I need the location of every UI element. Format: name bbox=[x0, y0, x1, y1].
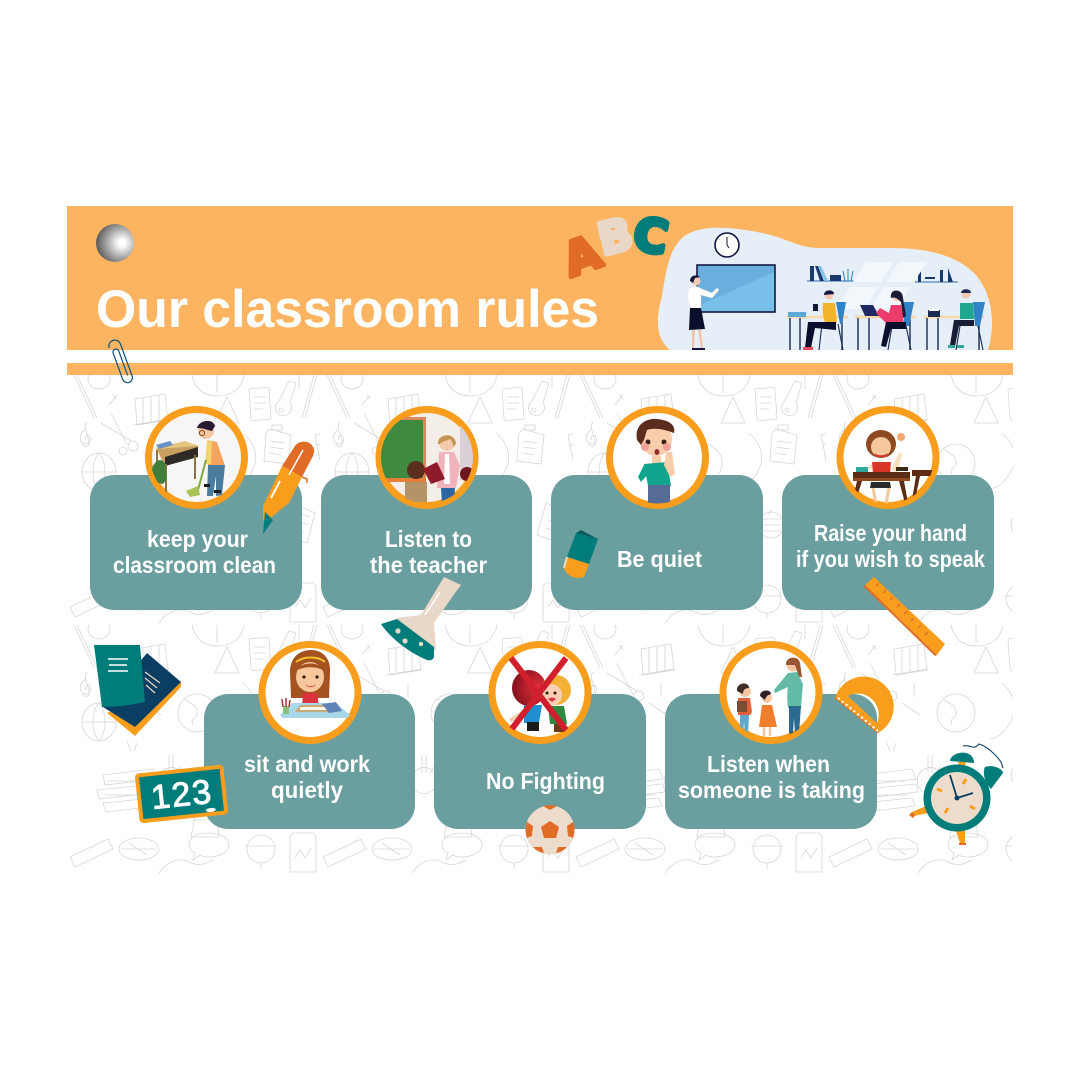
rule text: the teacher bbox=[370, 552, 487, 578]
icon: ruler bbox=[864, 577, 945, 656]
orange stripe bbox=[67, 363, 1013, 375]
rule text: Listen when bbox=[707, 751, 830, 777]
icon: chalkboard 123: 123 bbox=[149, 773, 213, 817]
wall clock bbox=[715, 233, 739, 257]
icon: pen bbox=[263, 442, 314, 534]
blob background bbox=[658, 228, 992, 350]
rule text bbox=[113, 526, 276, 578]
rule text: Be quiet bbox=[617, 546, 702, 572]
icon: soccer ball bbox=[526, 805, 574, 854]
rule text: classroom clean bbox=[113, 552, 276, 578]
metallic ball bbox=[96, 224, 134, 262]
icon: teacher with children bbox=[723, 644, 819, 740]
classroom illustration bbox=[658, 228, 992, 350]
icon: chalkboard 123 bbox=[135, 764, 228, 823]
paper clip bbox=[107, 338, 134, 385]
window reflection bbox=[837, 262, 927, 309]
card: be quiet bbox=[551, 410, 763, 610]
rule text: keep your bbox=[147, 526, 248, 552]
header banner bbox=[67, 206, 1013, 350]
rule text: someone is taking bbox=[678, 777, 865, 803]
card: keep your classroom clean bbox=[90, 410, 302, 610]
rule text: Raise your hand bbox=[814, 520, 967, 546]
teacher bbox=[688, 275, 719, 350]
icon: books bbox=[94, 645, 181, 736]
doodle pattern background bbox=[67, 375, 1013, 875]
icon: teacher and students bbox=[378, 410, 476, 506]
rule text: quietly bbox=[271, 777, 343, 803]
card: sit and work quietly bbox=[204, 644, 415, 829]
rule text bbox=[244, 751, 370, 803]
rule text: Listen to bbox=[385, 526, 472, 552]
shelves bbox=[807, 266, 958, 282]
rule text bbox=[796, 520, 985, 572]
icon: girl studying bbox=[262, 644, 358, 740]
rule text: sit and work bbox=[244, 751, 370, 777]
card: listen to the teacher bbox=[321, 410, 532, 610]
letters ABC: B bbox=[593, 208, 638, 266]
rule text bbox=[370, 526, 487, 578]
blackboard screen bbox=[697, 265, 775, 312]
letters ABC: C bbox=[629, 206, 672, 265]
rule text bbox=[678, 751, 865, 803]
letters ABC: A bbox=[556, 224, 608, 287]
card: listen when someone is talking bbox=[665, 644, 877, 829]
icon: girl raising hand bbox=[840, 410, 936, 506]
letters ABC bbox=[556, 206, 672, 287]
icon: alarm clock bbox=[909, 744, 1003, 845]
icon: boys fighting crossed out bbox=[492, 644, 588, 740]
icon: protractor bbox=[835, 677, 894, 733]
card: no fighting bbox=[434, 644, 646, 854]
icon: boy cleaning desk bbox=[148, 410, 244, 506]
title: Our classroom rules bbox=[96, 280, 599, 339]
rule text: No Fighting bbox=[486, 768, 605, 794]
rule text: if you wish to speak bbox=[796, 546, 985, 572]
icon: eraser bbox=[564, 530, 598, 578]
desks and students bbox=[787, 289, 985, 350]
card: raise your hand bbox=[782, 410, 994, 610]
icon: flask bbox=[381, 577, 461, 660]
icon: quiet boy bbox=[610, 410, 706, 507]
